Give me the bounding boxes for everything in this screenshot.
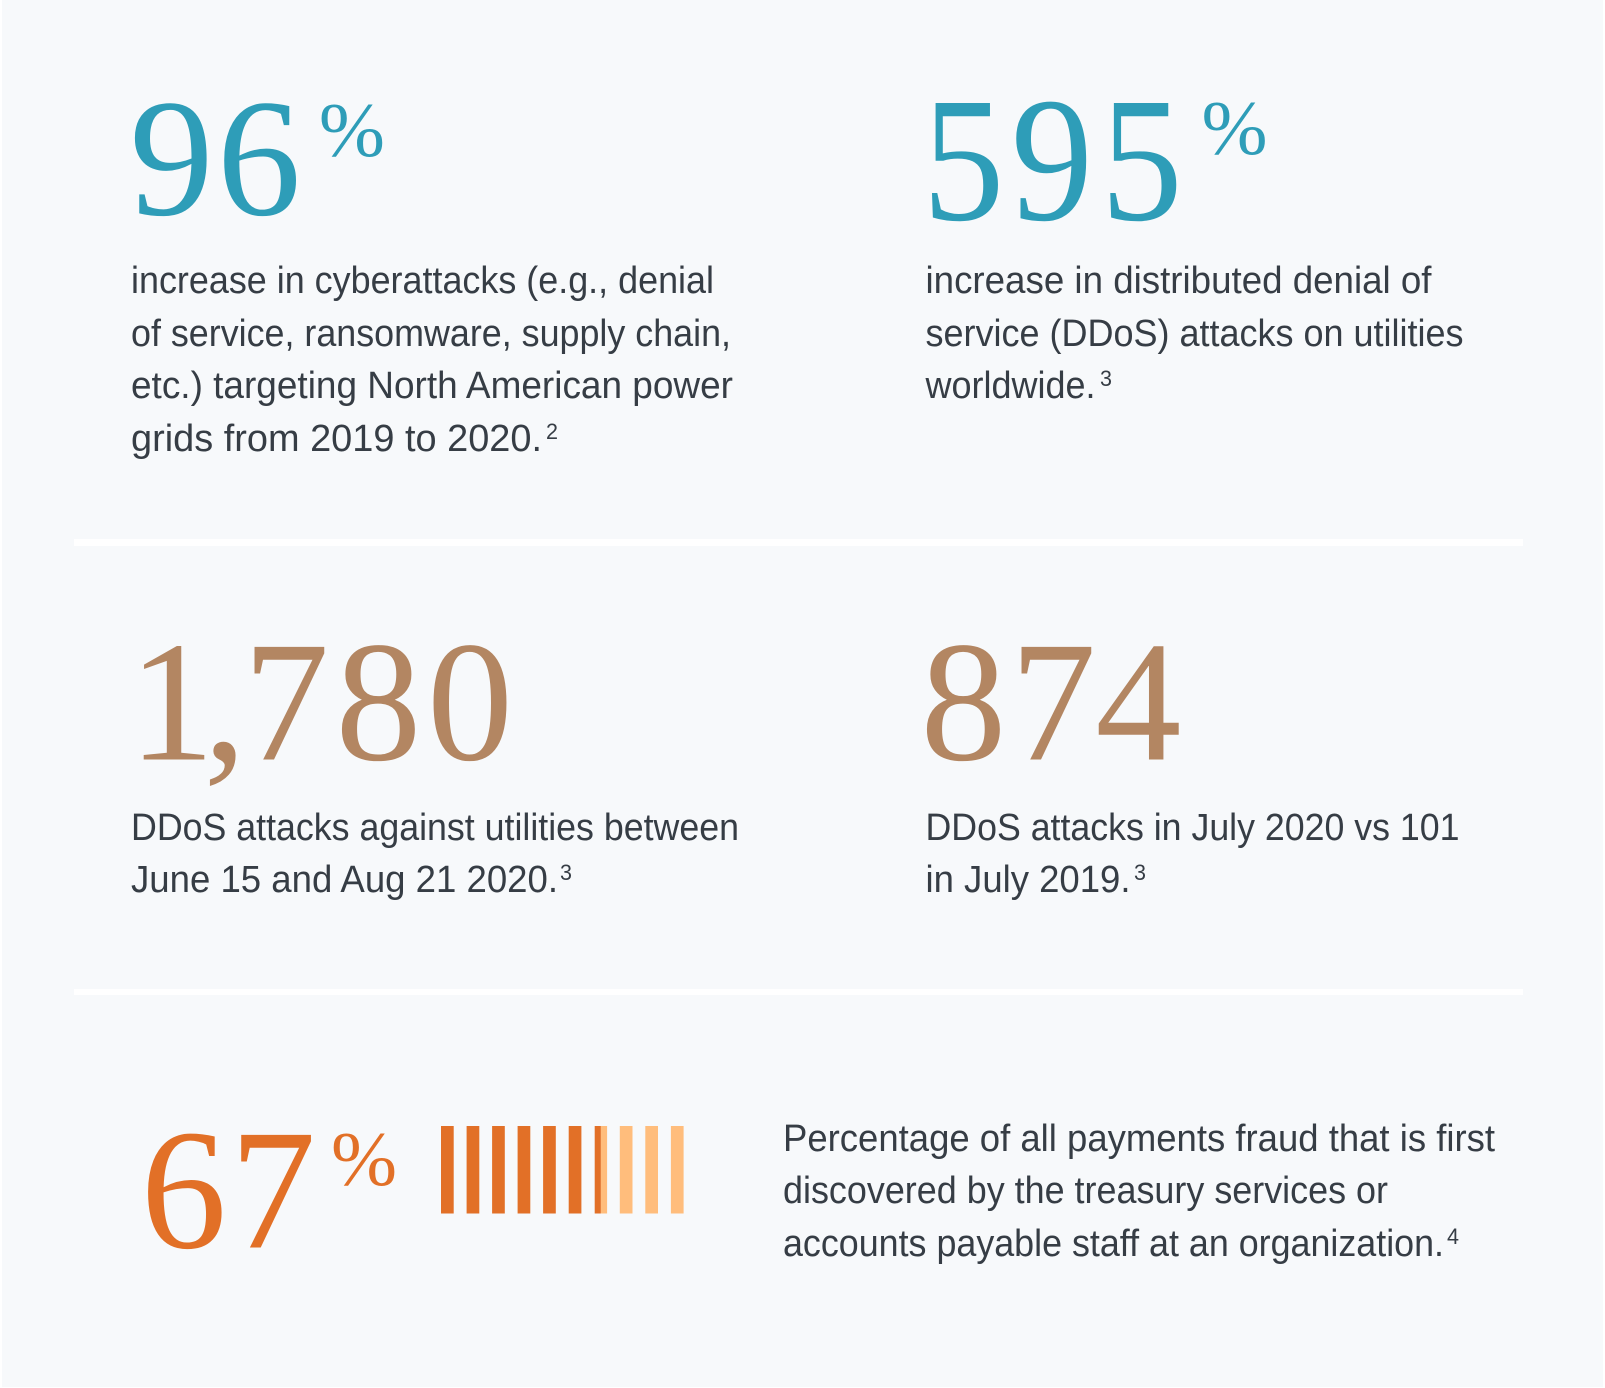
stat: 1,780 [129, 608, 739, 901]
description: DDoS attacks in July 2020 vs 101 [926, 807, 1460, 849]
description: increase in cyberattacks (e.g., denial [131, 260, 714, 302]
number: 1,780: 1,780 [129, 608, 513, 798]
description: worldwide. [925, 365, 1096, 407]
description: 3 [1134, 860, 1146, 885]
number: 67: 67 [141, 1096, 316, 1286]
description: service (DDoS) attacks on utilities [926, 313, 1464, 355]
description [131, 260, 733, 460]
description [131, 807, 739, 901]
number: 96: 96 [130, 66, 301, 252]
description: 4 [1447, 1224, 1459, 1249]
description: in July 2019. [926, 859, 1130, 901]
description [926, 807, 1460, 901]
divider 2 [74, 989, 1523, 995]
percent sign: % [319, 87, 385, 173]
percent sign: % [1201, 85, 1268, 171]
description: DDoS attacks against utilities between [131, 807, 739, 849]
stat: 874 [920, 608, 1460, 901]
percent sign: % [331, 1116, 397, 1202]
description: 3 [1100, 366, 1112, 391]
description: etc.) targeting North American power [131, 365, 733, 407]
description: 2 [546, 419, 558, 444]
divider 1 [74, 539, 1523, 546]
number: 595: 595 [922, 61, 1183, 258]
description: discovered by the treasury services or [783, 1170, 1388, 1212]
bar pictogram: 67 of 100 [441, 1126, 684, 1214]
description: June 15 and Aug 21 2020. [131, 859, 558, 901]
stat: 67 percent [141, 1096, 1495, 1286]
description [925, 260, 1464, 407]
description: accounts payable staff at an organization. [783, 1223, 1444, 1265]
stat: 96 percent [130, 66, 733, 460]
description: 3 [560, 860, 572, 885]
stat: 595 percent [922, 61, 1464, 407]
description: Percentage of all payments fraud that is first [783, 1118, 1495, 1160]
description: grids from 2019 to 2020. [131, 418, 542, 460]
description: of service, ransomware, supply chain, [131, 313, 731, 355]
description [783, 1118, 1495, 1265]
description: increase in distributed denial of [926, 260, 1432, 302]
number: 874: 874 [920, 608, 1181, 798]
